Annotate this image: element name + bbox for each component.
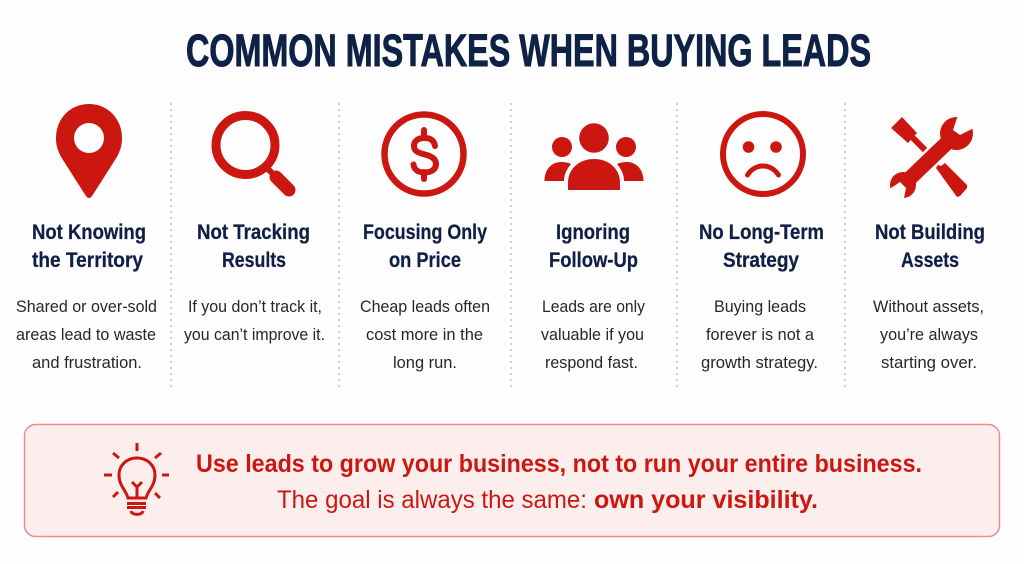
text: cheap leads: long run. bbox=[393, 353, 457, 372]
icon: group of people bbox=[544, 123, 644, 190]
heading: no long-term strategy: No Long-Term bbox=[699, 221, 824, 244]
text: buying leads forever: growth strategy. bbox=[701, 353, 818, 372]
icon: dollar coin bbox=[384, 114, 464, 194]
heading: not tracking results: Results bbox=[222, 249, 286, 272]
panel: ignoring follow-up bbox=[541, 123, 645, 372]
heading: ignoring follow-up: Ignoring bbox=[556, 221, 630, 244]
heading: not tracking results: Not Tracking bbox=[197, 221, 310, 244]
panel: not knowing the territory bbox=[16, 104, 157, 372]
text: without assets bbox=[873, 297, 984, 372]
panel: not building assets bbox=[873, 106, 985, 372]
text: without assets: starting over. bbox=[881, 353, 977, 372]
heading: ignoring follow-up bbox=[549, 221, 638, 272]
icon: lightbulb bbox=[104, 443, 169, 514]
text: cheap leads: cost more in the bbox=[366, 325, 483, 344]
text: shared areas: Shared or over-sold bbox=[16, 297, 157, 316]
heading: not knowing the territory: the Territory bbox=[32, 249, 143, 272]
callout line 1: Use leads to grow your business, not to run your entire business. bbox=[196, 450, 922, 478]
callout line 2 bbox=[277, 486, 818, 514]
text: shared areas: and frustration. bbox=[32, 353, 142, 372]
icon: wrench and screwdriver bbox=[882, 106, 982, 206]
heading: no long-term strategy: Strategy bbox=[723, 249, 799, 272]
text: track it bbox=[184, 297, 325, 344]
heading: not knowing the territory: Not Knowing bbox=[32, 221, 146, 244]
heading: ignoring follow-up: Follow-Up bbox=[549, 249, 638, 272]
text: buying leads forever: forever is not a bbox=[706, 325, 815, 344]
text: without assets: you’re always bbox=[880, 325, 978, 344]
text: buying leads forever: Buying leads bbox=[714, 297, 806, 316]
icon: sad face bbox=[723, 114, 803, 194]
heading: not building assets bbox=[875, 221, 985, 272]
heading: focusing only on price: on Price bbox=[389, 249, 461, 272]
callout line 2: The goal is always the same: bbox=[277, 486, 587, 514]
heading: no long-term strategy bbox=[699, 221, 824, 272]
heading: not tracking results bbox=[197, 221, 310, 272]
text: respond fast bbox=[541, 297, 645, 372]
banner background bbox=[24, 424, 1000, 536]
text: track it: If you don’t track it, bbox=[188, 297, 322, 316]
text: shared areas bbox=[16, 297, 157, 372]
callout banner bbox=[24, 424, 1000, 536]
text: track it: you can’t improve it. bbox=[184, 325, 325, 344]
text: cheap leads bbox=[360, 297, 490, 372]
heading: not building assets: Not Building bbox=[875, 221, 985, 244]
icon: map pin bbox=[56, 104, 122, 198]
heading: focusing only on price bbox=[363, 221, 487, 272]
heading: not knowing the territory bbox=[32, 221, 146, 272]
text: respond fast: valuable if you bbox=[541, 325, 644, 344]
text: respond fast: Leads are only bbox=[542, 297, 645, 316]
text: respond fast: respond fast. bbox=[545, 353, 638, 372]
callout line 2: own your visibility. bbox=[594, 486, 818, 514]
text: without assets: Without assets, bbox=[873, 297, 984, 316]
text: buying leads forever bbox=[701, 297, 818, 372]
heading: not building assets: Assets bbox=[901, 249, 959, 272]
panel: not tracking results bbox=[184, 116, 325, 344]
text: shared areas: areas lead to waste bbox=[16, 325, 156, 344]
heading: focusing only on price: Focusing Only bbox=[363, 221, 487, 244]
panel: no long-term strategy bbox=[699, 114, 824, 372]
text: cheap leads: Cheap leads often bbox=[360, 297, 490, 316]
icon: magnifying glass bbox=[216, 116, 289, 190]
panel: focusing only on price bbox=[360, 114, 490, 372]
